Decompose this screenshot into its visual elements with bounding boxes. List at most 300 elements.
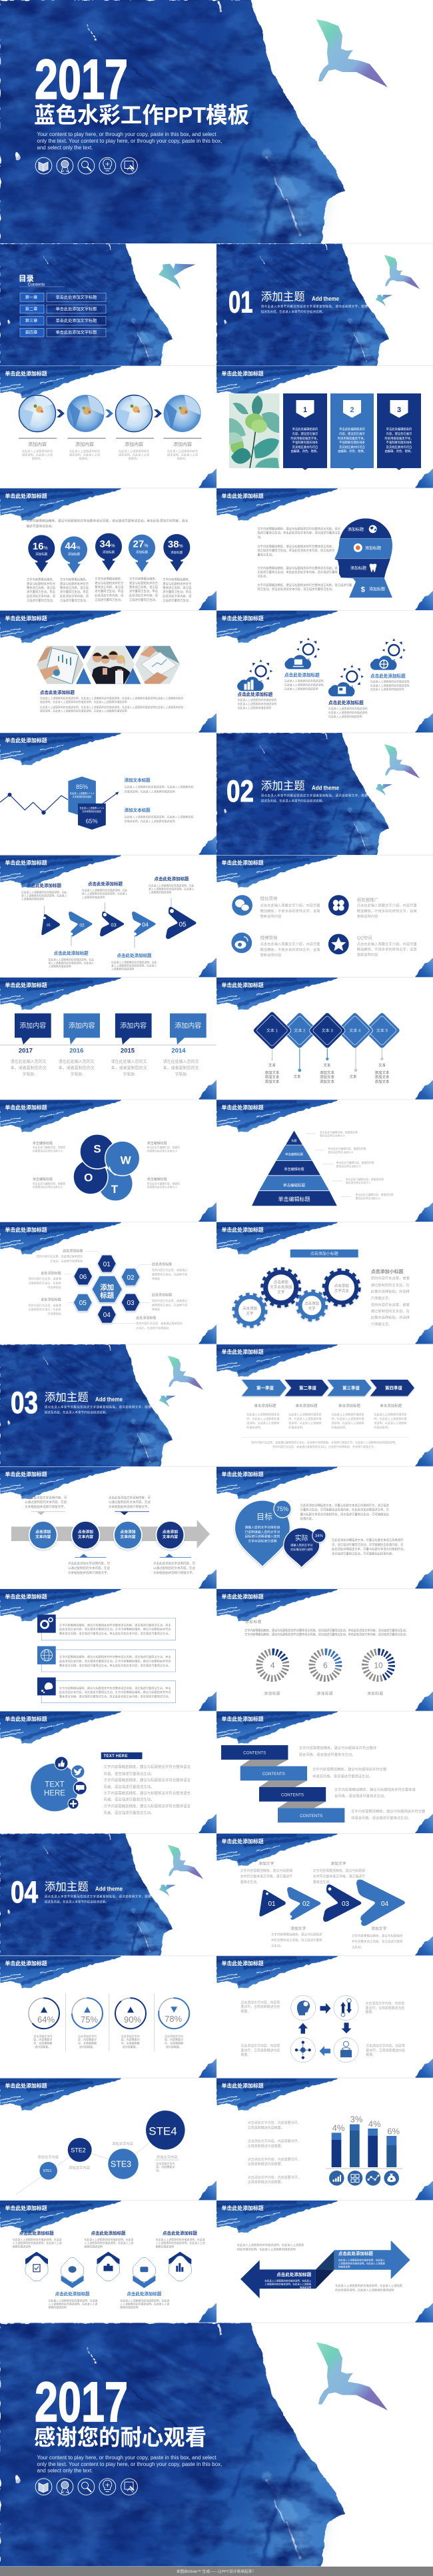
bar chart: 6% (387, 2127, 400, 2137)
heading: 单击此处添加标题 (221, 1471, 264, 1478)
pin captions: 此处添加文本内容，语 (129, 593, 159, 597)
top labels: 点击此处添加标题 (91, 2230, 126, 2236)
section number: 04 (11, 1875, 38, 1909)
closing cover slide (0, 2323, 433, 2570)
card 3: 内容，建议您在展示 (386, 431, 412, 436)
center hexagon (92, 1276, 122, 1302)
timeline text: 请在此处输入您的文 (59, 1059, 95, 1064)
text: weibo: 点击在此输入简要文字介绍，内容尽量 (260, 942, 320, 947)
captions: 描述说明，在此录入上述 (167, 452, 199, 457)
chevron row (242, 1380, 414, 1396)
slide: hexagon icons (0, 2199, 218, 2324)
icon: chat (73, 1781, 87, 1794)
quarter titles: 单击添加标题 (254, 1403, 276, 1408)
pin captions: 言描述尽量简洁生动。 (95, 597, 123, 602)
text block top: 段落内容。 (300, 1516, 314, 1521)
heading: 单击此处添加标题 (5, 860, 47, 866)
section description: 描述及总结。在此录入本章节的综合描述说明。 (261, 799, 325, 804)
captions: 图表的。 (177, 456, 188, 461)
quarter text: 述说明，在此录入上述图表 (288, 1420, 321, 1424)
chevron row: 第二季度 (299, 1385, 317, 1391)
cloud text 3: 在此录入上述图表的综合描述说明, (328, 707, 368, 710)
pin captions: 建议与标题相关并符合 (95, 581, 124, 585)
card 1: 由编辑、改色、替换。 (291, 449, 319, 453)
hexagon labels left: 中选择粘贴 (47, 1312, 61, 1316)
icon: up down coins (334, 1995, 358, 2021)
bar chart: 4% (368, 2119, 381, 2129)
row 2: 此处添加文本内容，语言描述尽量简洁生动。文字内容需概括精炼，建议与标题相关并符合 (59, 1658, 171, 1663)
cycle text: 要详尽，言简意赅概述内容 (241, 2049, 280, 2053)
quarter titles: 单击添加标题 (338, 1403, 360, 1408)
pin captions: 整体语言风格，语言描 (129, 585, 159, 589)
chevron (154, 409, 162, 417)
hexagon labels left: 您的内容打在这里，或者通过复制您的 (37, 1254, 83, 1258)
gear 1: 点击添加 (274, 1280, 288, 1285)
card 2: 内容，建议您在展示 (339, 431, 366, 436)
contents rows: 单击此处添加文字标题 (56, 307, 97, 312)
contents bar 3: CONTENTS (281, 1792, 304, 1797)
bottom note 2: 以通过复制您的文本内容，在此 (153, 1566, 195, 1570)
label 4: 并符合整体语言风格，语言描述尽量简 (352, 1939, 403, 1944)
hexagon 06 (74, 1268, 93, 1285)
ring 75%: 75% (81, 2015, 98, 2025)
label 4: 点击此处添加标题 (117, 952, 152, 958)
label 1: 量简洁生动。 (240, 1880, 260, 1884)
contents bar 1: CONTENTS (243, 1750, 266, 1755)
text: weibo (260, 935, 320, 958)
card 1: 内容，建议您在展示 (292, 431, 318, 436)
text block 1: 添加文本标题 (125, 777, 151, 783)
head text: 量简洁生动。 (257, 552, 274, 557)
hexagon 65%: 文本段落的综合描述 (82, 810, 102, 813)
years: 2014 (171, 1047, 186, 1055)
section title: 添加主题 (261, 291, 305, 303)
head text: 简洁生动。单击此处添加文本内容，语言描述尽量简洁生动。 (257, 587, 334, 591)
contents rows: 第三章 (25, 318, 37, 323)
label 2: 点击此处添加标题 (54, 950, 89, 956)
subtitle bar: 点击添加小标题 (310, 1251, 338, 1256)
grey connectors (240, 1760, 326, 1808)
row 1: 此处添加文本内容，语言描述尽量简洁生动。文字内容需概括精炼，建议与标题相关并符合 (59, 1627, 171, 1632)
pin captions: 整体语言风格，语言描 (27, 585, 56, 590)
SWOT diagram: O (84, 1171, 93, 1184)
grey arrow (11, 1520, 210, 1548)
hexagon labels left: 此处添加标题 (41, 1297, 61, 1302)
pyramid notes: 单击此处可编辑内容，根据您的需 (336, 1161, 374, 1164)
icon row (35, 2479, 137, 2495)
icon: watercolor bird (316, 19, 388, 87)
row 3: 整体语言风格，语言描述尽量简洁生动。单击此处添加文本内容，语言描述尽量简洁生动。 (59, 1694, 171, 1699)
circle 4 (156, 1521, 184, 1549)
cloud text 3: 在此录入上述图表的描述说明 (328, 715, 362, 718)
heading: 单击此处添加标题 (5, 370, 47, 377)
pin 34%: 添加标题 (103, 550, 115, 555)
card 2: 时采用微软雅黑字体， (338, 436, 366, 441)
big circle: HERE (44, 1789, 65, 1797)
label 1: 录入上述图表的综合描述说明。在此录入 (21, 894, 67, 898)
step labels: 添加文字内容 (112, 2141, 134, 2146)
cloud text 3: 在此录入上述图表的综合描述说明, (328, 711, 368, 714)
arrow down (341, 2023, 352, 2033)
label 5: 录入上述图表的综合描述说明。在此录入 (149, 888, 195, 891)
ring captions: 点击添加文字内 (165, 2034, 183, 2038)
icon: weibo (231, 932, 252, 953)
diamond labels: 文本 (378, 1063, 386, 1068)
quarter text: 的描述说明。 (374, 1425, 390, 1429)
ring 64%: 64% (37, 2015, 55, 2025)
target drop: 目标进行说明请输入您的 (245, 1534, 280, 1539)
label 1: 上述图表的描述说明 (21, 898, 44, 901)
icon: small bird (159, 264, 196, 289)
step STE1 (39, 2162, 57, 2180)
cloud text 2: 点击此处添加标题 (284, 672, 320, 678)
icon: plus (68, 1798, 79, 1809)
SWOT text: 单击编辑标题 (33, 1141, 53, 1146)
ring captions: 尽，言简意赅概 (121, 2041, 140, 2045)
timeline text: 请在此处输入您的文 (111, 1059, 147, 1064)
hexagon labels left (29, 1248, 83, 1315)
top labels: 点击此处添加标题 (19, 2230, 54, 2236)
section number: 02 (226, 774, 254, 808)
head text: 言描述尽量简洁生动。单击此处添加文本内容，语言描述尽量简 (257, 569, 338, 574)
circle 4: 文本内容 (163, 1534, 178, 1540)
gear text: 您的内容打在这里，或者 (371, 1276, 410, 1281)
bar text: 点击添加文字内容，内容需要详尽， (248, 2175, 301, 2180)
actual drop: 请输入您的文字对 (290, 1543, 312, 1548)
gear 1: 文字点击添加 (270, 1284, 292, 1290)
circle 1 (29, 1521, 57, 1549)
pin 34% (95, 533, 122, 571)
target drop: 文字对目标进行说明 (248, 1539, 277, 1544)
text: moments: 点击在此输入简要文字介绍，内容尽量 (357, 903, 417, 908)
top labels: 入上述图表的综合描述说明。在此录入上述 (156, 2241, 205, 2245)
icon: head with coins (291, 1995, 316, 2021)
note top: 的综合描述说明。在此录入上述图表的描述说明 (237, 2247, 296, 2251)
top labels: 图表的描述说明 (84, 2245, 103, 2249)
cloud 4 (370, 639, 406, 670)
cycle text: 点击添加文字内容，内容需 (365, 2001, 404, 2006)
circle 3: 文本内容 (120, 1534, 136, 1540)
ring captions: 述内容概要。 (166, 2045, 182, 2049)
photo: tablet chart (37, 646, 84, 685)
top labels: 在此录入上述图表的综合描述说明，在此录 (156, 2238, 205, 2241)
heading: 单击此处添加标题 (5, 1226, 47, 1233)
arrow up (298, 2023, 308, 2034)
section english title: Add theme (312, 785, 339, 792)
bottom note 1: 点击此处添加文字说明内容，可 (68, 1561, 110, 1566)
bottom note 1: 以通过复制您的文本内容，在此 (68, 1566, 110, 1570)
heading: 单击此处添加标题 (221, 860, 264, 866)
slide: diamonds (217, 976, 433, 1101)
pyramid notes: 单击此处可编辑内容，根据您的需 (320, 1130, 358, 1134)
diamond 5 (363, 1012, 401, 1050)
pin captions: 言描述尽量简洁生动。 (60, 598, 89, 603)
icon: qq star (328, 934, 349, 954)
card 1: 不强制要有图形线条 (292, 440, 318, 445)
connector lines (65, 1252, 151, 1324)
arrow left (320, 2046, 330, 2056)
diamond labels: 添加文本 (374, 1079, 390, 1084)
badge 5 (169, 2252, 191, 2281)
slide: stacked contents (217, 1709, 433, 1834)
text block 2: 添加文本标题 (125, 807, 151, 813)
SWOT text: 的需要自由拉伸文本框大小 (147, 1185, 177, 1188)
diamond labels: 添加文本 (264, 1074, 280, 1080)
bottom note 1: 文本框粘贴并选择只保留文字。 (68, 1570, 110, 1575)
captions: 在此录入上述图表的综合 (69, 449, 101, 453)
cycle text: 点击添加文字内容，内容需 (241, 2044, 280, 2049)
dial 4: 4 (270, 1661, 275, 1670)
ring captions: 尽，言简意赅概 (165, 2041, 183, 2045)
step note: 容，内容需要详 (156, 2165, 175, 2169)
cycle text: 要详尽，言简意赅概述内容 (241, 2005, 280, 2009)
row 3 (37, 1678, 176, 1702)
ring captions: 点击添加文字内 (121, 2034, 140, 2038)
label 3: 文字内容需概括精炼，建议与标题相关 (271, 1932, 322, 1937)
pyramid: 单击编辑标题 (278, 1196, 310, 1202)
hexagon labels left: 此处添加标题 (63, 1248, 83, 1253)
bar text: 言简意赅概述内容概要。 (248, 2144, 284, 2149)
SWOT text: 单击此处可编辑内容，根据您 (33, 1146, 66, 1149)
hexagon labels left: 过复制您的文本后，在此框 (29, 1281, 61, 1285)
section title: 添加主题 (45, 1391, 89, 1404)
card 3: 单击此处编辑图表的 (386, 427, 412, 431)
circle 1: 点击添加 (35, 1529, 51, 1534)
cycle text: 概要。 (241, 2053, 250, 2057)
label 2: 录入上述图表的综合描述说明。在此录入 (48, 962, 94, 965)
section english title: Add theme (312, 295, 339, 303)
head text: 语言描述尽量简洁生动。单击此处添加文本内容，语言描述尽 (257, 548, 335, 553)
quarter text: 述说明，在此录入上述图表 (246, 1420, 279, 1424)
top labels: 图表的描述说明 (156, 2245, 174, 2249)
cover subtitle: only the text. Your content to play here, or through your copy, paste in this box, (37, 138, 222, 144)
heading: 单击此处添加标题 (221, 1348, 264, 1355)
slide: arrow with circles (0, 1465, 218, 1590)
label 2: 关并符合整体语言风格，语言描述尽 (313, 1874, 365, 1879)
pin captions: 文字内容需概括精炼， (27, 577, 55, 581)
pin 27%: 27% (133, 539, 148, 550)
closing title: 感谢您的耐心观看 (34, 2425, 207, 2450)
SWOT text: 单击编辑标题 (147, 1141, 167, 1146)
timeline text: 本，或者复制您的文 (163, 1066, 199, 1071)
ring captions: 容，内容需要详 (33, 2037, 52, 2041)
contents text: 言风格，语言描述尽量简洁生动。 (334, 1793, 387, 1798)
card 1: 单击此处编辑图表的 (292, 427, 318, 431)
head text: 动。 (257, 535, 263, 539)
heading: 单击此处添加标题 (221, 2083, 264, 2089)
text: wechat: 点击在此输入简要文字介绍，内容尽量 (260, 903, 320, 908)
hexagon 65% (78, 804, 106, 830)
heading: contents: 目录 (19, 275, 34, 283)
pin 16%: 16% (33, 541, 48, 552)
slide: text here circle (0, 1709, 218, 1834)
card 3: 不强制要有图形线条 (386, 440, 412, 445)
cover subtitle: and select only the text. (37, 145, 93, 151)
contents text: 文字内容需概括精炼，建议与标题相关并符合整 (312, 1766, 387, 1772)
arrow 03 (323, 1884, 361, 1922)
pin 27%: 添加标题 (136, 550, 148, 555)
year 2017: 2017 (35, 2371, 128, 2433)
label 2: 上述图表的描述说明 (48, 965, 71, 968)
target drop: 目标 (256, 1512, 272, 1522)
photo: business people (86, 646, 136, 685)
contents rows: 第二章 (25, 307, 37, 312)
heading: 单击此处添加标题 (5, 1593, 47, 1600)
hexagon 02: 02 (127, 1274, 135, 1282)
head silhouette: 添加标题 (369, 586, 385, 591)
hexagon 05: 05 (79, 1300, 87, 1307)
hexagon labels right: 此处添加标题 (152, 1262, 172, 1266)
label 3: 录入上述图表的综合描述说明。在此录入 (82, 892, 128, 896)
cloud 1 (237, 660, 272, 691)
left arrow: 的描述说明 (300, 2286, 312, 2289)
bubble 4: 添加内容 (175, 1022, 201, 1030)
pin 44%: 44% (65, 540, 80, 551)
text block 2: 合描述说明。在此录入上述图表的描述说明 (125, 819, 175, 823)
step STE3 (108, 2149, 139, 2179)
text block top: 量与标题文本语言风格相符合，语言描述尽量简洁生动，尽可能概括出 (300, 1512, 389, 1517)
timeline text: 本，或者复制您的文 (11, 1066, 47, 1071)
quarter text: 在此录入上述图表的描述说 (374, 1412, 407, 1416)
pyramid notes: 单击此处可编辑内容，根据您的需 (328, 1147, 366, 1150)
arrow 04: 04 (142, 922, 149, 928)
label 1: 点击此处添加标题 (27, 882, 61, 888)
ring captions: 尽，言简意赅概 (33, 2041, 52, 2045)
text block: 文字内容需概括精炼，建议与标题相关并符合整体语言 (104, 1803, 191, 1808)
label 2: 添加文字 (330, 1860, 346, 1866)
note bottom: 在此录入上述图表的综合描述说明，在此录入上述图表 (335, 2283, 403, 2288)
hexagon 85%: 文本段落的综合描述 (73, 795, 92, 798)
diamond labels: 文本 (268, 1063, 276, 1068)
slide: four arrows (217, 1832, 433, 1957)
actual drop: 实际 (295, 1534, 308, 1542)
timeline text: 字粘贴 (123, 1072, 135, 1077)
text block 1: 合描述说明。在此录入上述图表的描述说明 (125, 789, 175, 793)
dials description: 文字内容需概括精炼，建议与标题相关并符合整体语言风格，语言描述尽量简洁生动。单击此处添加文本内容，语言描述尽量简洁生动。 (244, 1628, 408, 1632)
quarter text: 的描述说明。 (332, 1425, 348, 1429)
quarter text (246, 1412, 407, 1429)
ring captions: 容，内容需要详 (165, 2037, 183, 2041)
slide: percentage pins (0, 486, 218, 611)
gear 4: 文字点击 (334, 1288, 349, 1294)
right arrow (334, 2241, 410, 2279)
line chart (0, 792, 119, 815)
cloud text 4 (370, 673, 410, 691)
right arrow: 上述图表的综合描述说明。在此录入上述图表 (338, 2261, 385, 2265)
timeline text: 字粘贴 (71, 1072, 83, 1077)
ring 78% (159, 1998, 189, 2029)
bottom labels: 点击此处添加标题 (127, 2291, 162, 2297)
flower circle 1 (19, 395, 56, 432)
text block: 在此录入上述图表的综合描述说明，在此录入上述图表的综合描述说明，在此录入上述图表的描述说明在此录入上述图表的综合 (40, 697, 183, 700)
circle 2: 文本内容 (78, 1534, 93, 1540)
bottom note 2 (153, 1554, 195, 1575)
icon: people network (290, 2038, 315, 2063)
text block: 风格，语言描述尽量简洁生动。 (104, 1771, 155, 1776)
pin captions: 建议与标题相关并符合 (129, 581, 159, 585)
timeline text: 本，或者复制您的文 (59, 1066, 95, 1071)
triangles (76, 646, 141, 684)
bar chart: 3% (350, 2115, 363, 2125)
top labels: 在此录入上述图表的综合描述说明，在此录 (84, 2238, 134, 2241)
right arrow: 点击此处添加标题 (338, 2250, 373, 2257)
hexagon labels right: 复制您的文本后，在此框中选 (152, 1303, 187, 1307)
gear 2: 文字 (246, 1311, 254, 1316)
pyramid (252, 1131, 337, 1206)
diamond labels: 添加文本 (264, 1070, 280, 1075)
slide: section 02 (213, 733, 433, 856)
arrow 02 (69, 912, 93, 936)
heading: 单击此处添加标题 (221, 2205, 264, 2211)
contents bar 2: CONTENTS (262, 1772, 285, 1776)
circle 2: 点击添加 (78, 1529, 93, 1534)
heading: 单击此处添加标题 (5, 737, 47, 744)
card 3: 3 (397, 406, 401, 414)
heading: 单击此处添加标题 (5, 492, 47, 499)
pin captions: 建议与标题相关并符合 (163, 581, 192, 586)
bar text: 言简意赅概述内容概要。 (248, 2125, 284, 2130)
cloud text 1 (237, 691, 277, 710)
dial captions: 添加标题 (264, 1691, 280, 1696)
text block top: 在此处添加详细描述文本，尽量与标题文本语言风格相符合，语言描述 (300, 1503, 390, 1508)
row 1: 文字内容需概括精炼，建议与标题相关并符合整体语言风格，语言描述尽量简洁生动。单击 (59, 1623, 171, 1627)
slide: section 03 (0, 1344, 217, 1468)
bottom note 1 (68, 1554, 110, 1575)
text: qq: 意赅说明内容 (357, 952, 378, 958)
top labels: 在此录入上述图表的综合描述说明，在此录 (13, 2238, 62, 2241)
left arrow: 在此录入上述图表的综合描述说明，在此录入 (264, 2279, 312, 2282)
card 1: 时采用微软雅黑字体， (291, 436, 319, 441)
slide: clouds (217, 609, 433, 734)
circle 2 (72, 1521, 100, 1549)
head silhouette: 添加标题 (350, 565, 366, 571)
SWOT text: 的需要自由拉伸文本框大小 (33, 1185, 63, 1188)
pin captions: 此处添加文本内容，语 (60, 593, 89, 598)
captions: 图表的。 (79, 456, 90, 461)
step STE2: STE2 (71, 2147, 86, 2154)
pin captions: 述尽量简洁生动。单击 (163, 589, 192, 594)
label 2 (48, 950, 94, 968)
icon: wechat (232, 895, 252, 916)
pyramid notes: 要自由拉伸文本框大小 (320, 1134, 345, 1138)
chevron (105, 409, 113, 417)
cycle text: 点击添加文字内容，内容需 (241, 2001, 280, 2005)
heading: 单击此处添加标题 (221, 1593, 264, 1600)
head text: 文字内容需概括精炼，建议与标题相关并符合整体语言风格，语言描述尽量 (257, 583, 352, 587)
label 3 (271, 1926, 322, 1948)
SWOT diagram (73, 1134, 140, 1201)
section description: 描述及总结。在此录入本章节的综合描述说明。 (45, 1410, 109, 1415)
gear text: 通过复制您的文本后，在 (371, 1308, 410, 1314)
ring captions: 点击添加文字内 (78, 2034, 97, 2038)
dial captions: 添加标题 (367, 1691, 384, 1696)
text block 1: 在此录入上述图表的综合描述说明，在此录入上述图表的综 (125, 784, 194, 788)
captions: 描述说明，在此录入上述 (119, 452, 150, 457)
year 2017: 2017 (35, 48, 128, 111)
quarter text: 述说明，在此录入上述图表 (374, 1420, 407, 1424)
diamond labels: 添加文本 (320, 1079, 334, 1084)
pyramid: 单击编辑标题 (284, 1167, 304, 1172)
icon: watercolor bird (316, 2343, 388, 2411)
quarter text: 明，在此录入上述图表的描 (374, 1416, 407, 1420)
text: moments: 意赅说明内容 (357, 914, 378, 919)
diamond 3: 文本 3 (322, 1028, 333, 1033)
bottom labels: 在此录入上述图表的综合描述说明，在此录 (120, 2299, 169, 2302)
text block: 文字内容需概括精炼，建议与标题相关并符合整体语言 (104, 1790, 191, 1796)
card 2: 及其相应素材均可自 (339, 445, 365, 449)
slide: plant and three boxes (217, 364, 433, 489)
label 4 (111, 952, 157, 971)
